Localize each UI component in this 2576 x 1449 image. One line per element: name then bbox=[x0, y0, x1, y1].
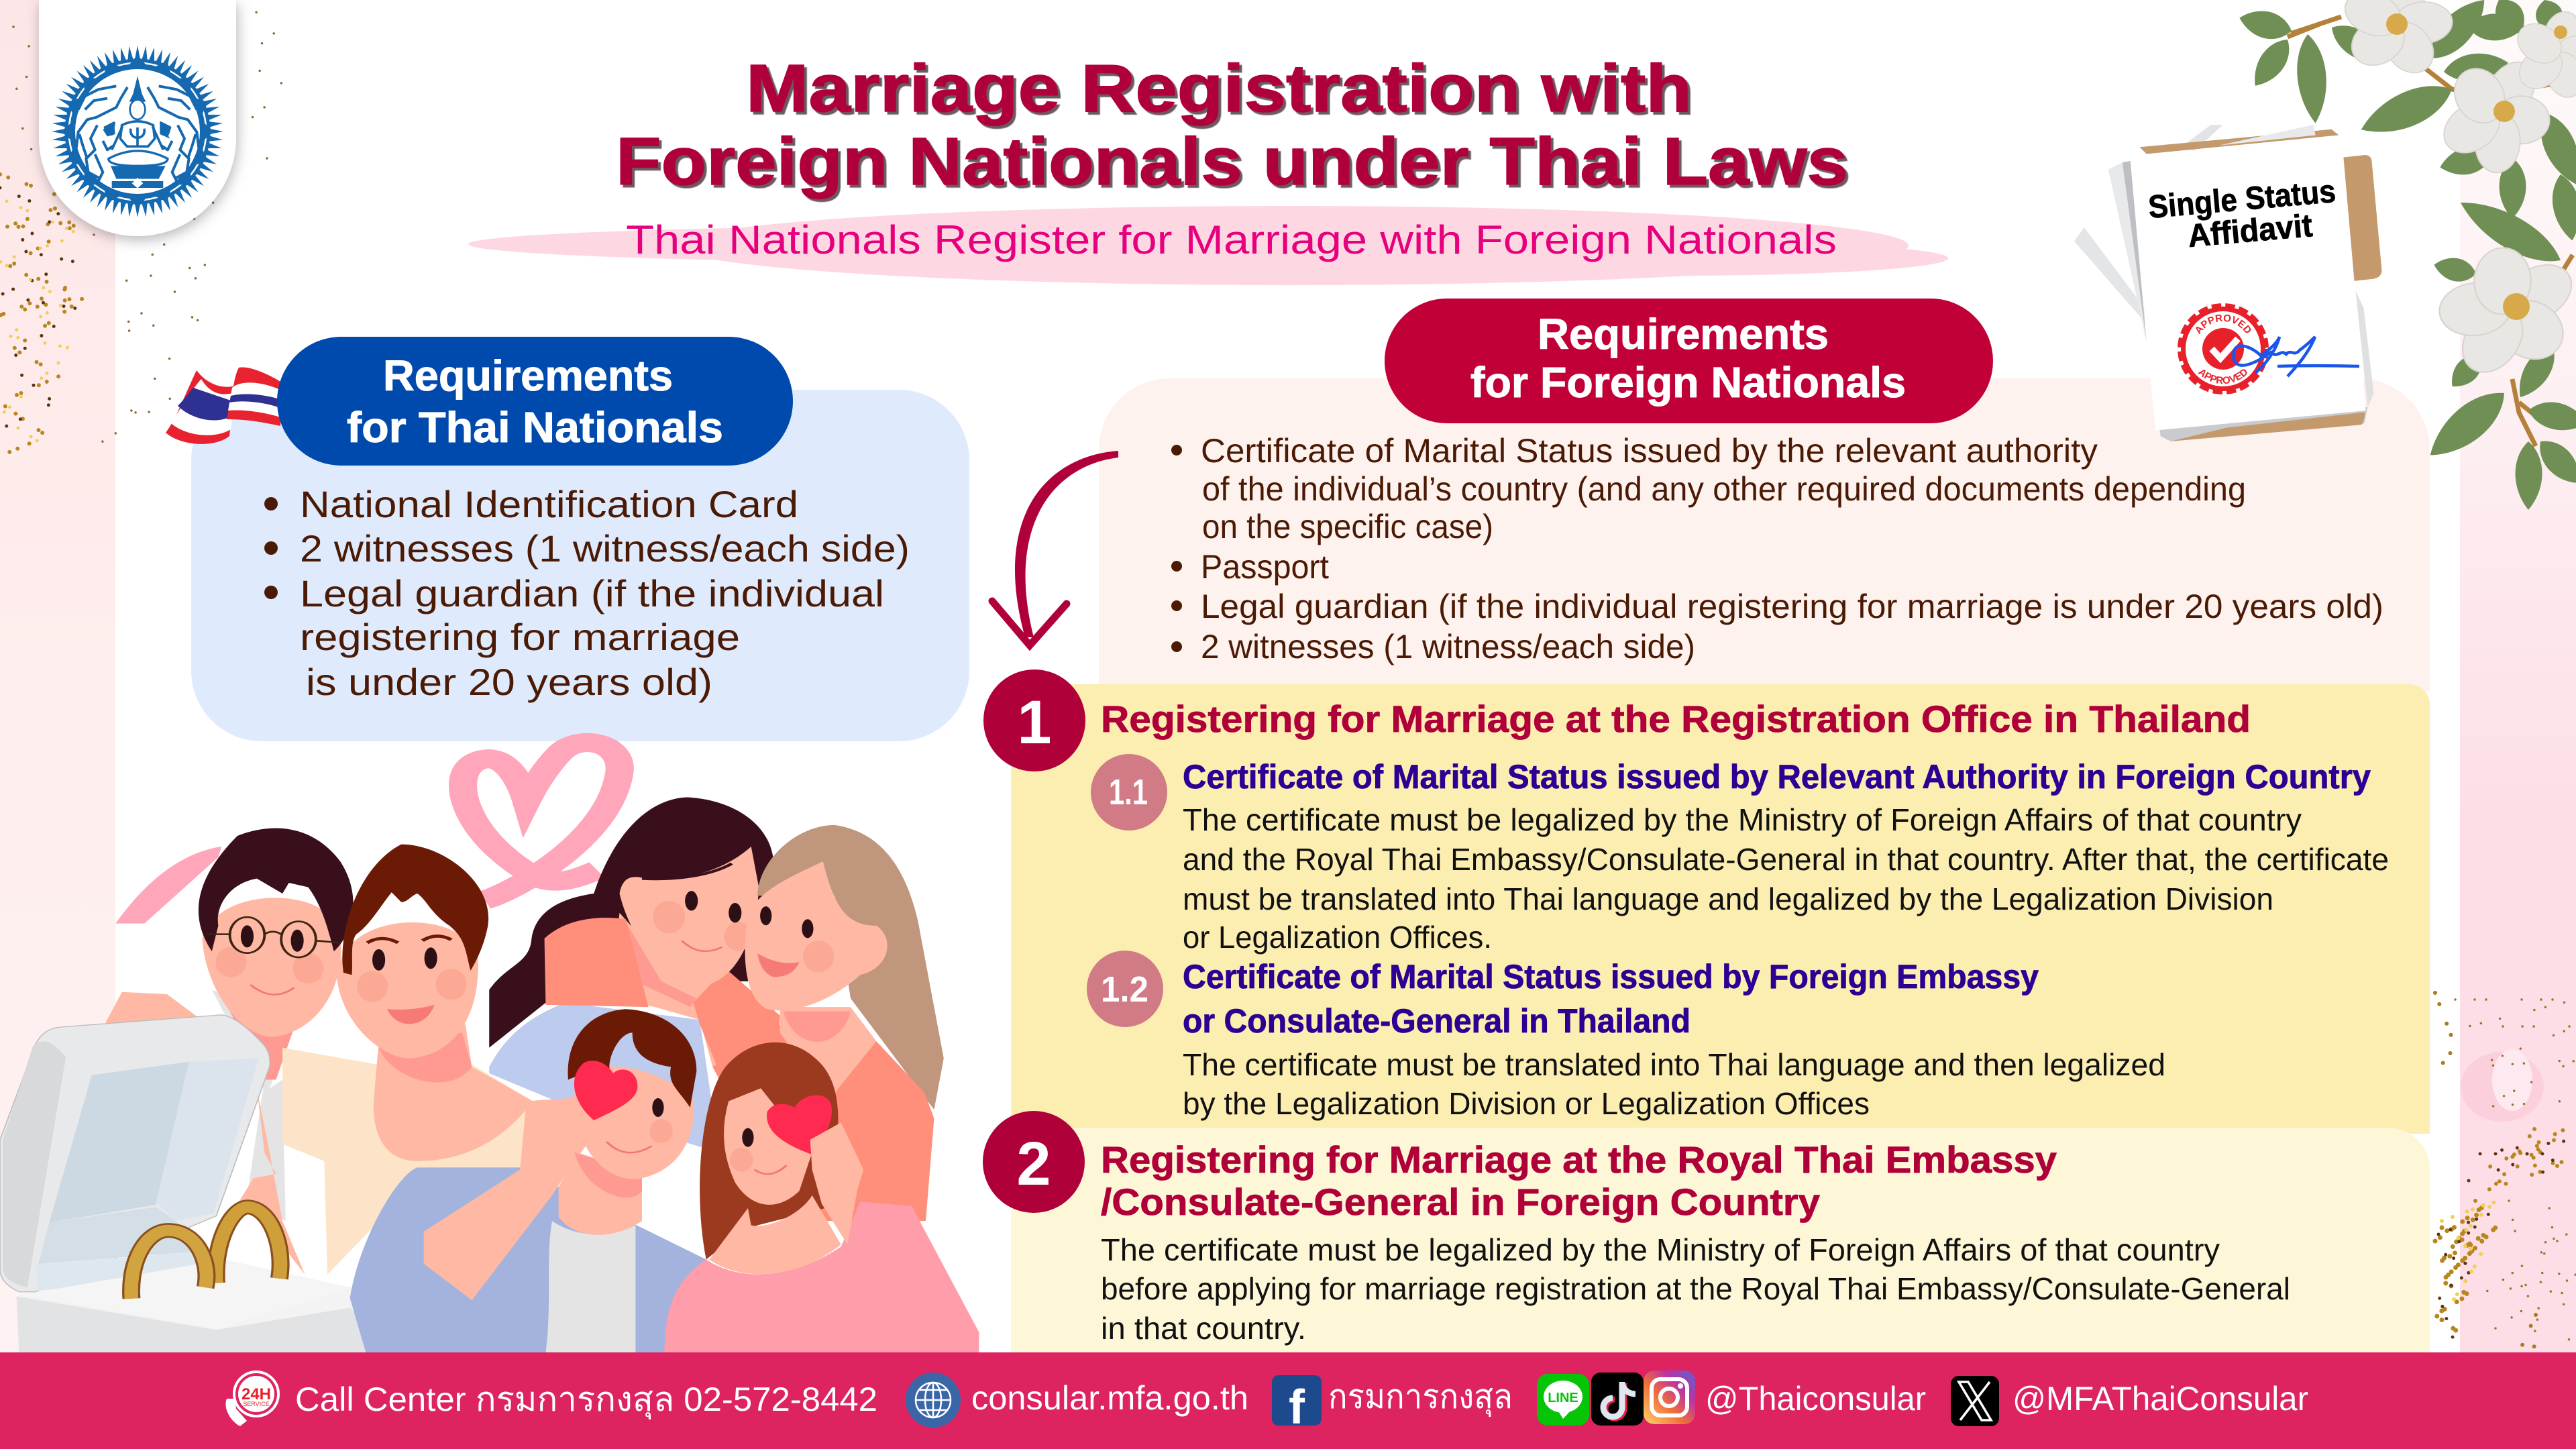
item 1.2: by the Legalization Division or Legalization Offices bbox=[1183, 1086, 1870, 1121]
illustration: couples and ring box bbox=[0, 743, 979, 1353]
document text bbox=[2147, 174, 2340, 258]
panel: section 2 registration abroad bbox=[983, 1111, 2430, 1352]
title: Foreign Nationals under Thai Laws bbox=[616, 124, 1848, 199]
icon: 24h phone: 24H bbox=[241, 1385, 271, 1403]
requirement list bbox=[264, 483, 910, 703]
arrow bbox=[992, 451, 1118, 645]
ribbon heart bbox=[115, 743, 620, 924]
heading pill: for Thai Nationals bbox=[347, 403, 723, 451]
heading pill: Requirements bbox=[383, 352, 673, 400]
icon: facebook: f bbox=[1289, 1381, 1305, 1434]
icon: facebook bbox=[1272, 1375, 1322, 1434]
icon: X bbox=[1951, 1376, 1999, 1426]
icon: approved stamp bbox=[2178, 303, 2269, 394]
requirement list: registering for marriage bbox=[300, 616, 740, 658]
item 1.1: and the Royal Thai Embassy/Consulate-General in that country. After that, the certificate bbox=[1183, 842, 2389, 877]
man in cream shirt bbox=[282, 845, 533, 1275]
number badge 1 bbox=[983, 669, 1085, 771]
illustration: single status affidavit document bbox=[2074, 125, 2381, 441]
requirement list bbox=[1171, 432, 2383, 665]
icon: globe bbox=[906, 1373, 961, 1428]
item 1.1: or Legalization Offices. bbox=[1183, 920, 1492, 955]
item 1.2: or Consulate-General in Thailand bbox=[1183, 1002, 1690, 1040]
icon: ring box bbox=[0, 1015, 383, 1352]
woman with blonde hair bbox=[712, 825, 944, 1221]
item 1.2: 1.2 bbox=[1101, 969, 1148, 1010]
requirement list: Legal guardian (if the individual registering for marriage is under 20 years old) bbox=[1201, 588, 2383, 625]
section 2 body bbox=[1101, 1232, 2290, 1346]
section 1 heading: Registering for Marriage at the Registration Office in Thailand bbox=[1101, 698, 2251, 740]
number badge 1: 1 bbox=[1017, 688, 1052, 757]
icon: approved stamp: APPROVED bbox=[2196, 315, 2251, 334]
icon: LINE bbox=[1537, 1374, 1589, 1426]
illustration: white flowers and leaves bbox=[2236, 0, 2576, 510]
heading pill: for Foreign Nationals bbox=[1470, 358, 1906, 407]
requirement list: 2 witnesses (1 witness/each side) bbox=[1201, 628, 1695, 665]
item 1.2 bbox=[1087, 951, 2165, 1121]
icon: 24h phone bbox=[225, 1372, 278, 1426]
heading pill: Requirements bbox=[1538, 310, 1829, 358]
document text: Affidavit bbox=[2186, 208, 2314, 254]
icon: red heart bbox=[767, 1095, 832, 1155]
footer contact bar bbox=[0, 1352, 2576, 1449]
Thaiconsular handle: @Thaiconsular bbox=[1705, 1380, 1926, 1417]
title bbox=[616, 51, 1848, 199]
icon: Thai flag bbox=[166, 367, 282, 444]
subtitle with pink brush: Thai Nationals Register for Marriage with Foreign Nationals bbox=[626, 217, 1837, 262]
stems bbox=[2288, 17, 2576, 446]
man with glasses bbox=[106, 828, 354, 1275]
flowers bbox=[2328, 0, 2576, 406]
logo tab with emblem bbox=[35, 0, 240, 236]
item 1.2: Certificate of Marital Status issued by Foreign Embassy bbox=[1183, 958, 2039, 996]
requirement list: of the individual’s country (and any other required documents depending bbox=[1202, 470, 2246, 508]
item 1.1: 1.1 bbox=[1109, 772, 1148, 812]
title: Marriage Registration with bbox=[746, 51, 1692, 126]
facebook name: กรมการกงสุล bbox=[1328, 1378, 1513, 1417]
icon: LINE: LINE bbox=[1548, 1391, 1578, 1405]
subtitle with pink brush bbox=[468, 206, 1948, 285]
item 1.1: must be translated into Thai language and legalized by the Legalization Division bbox=[1183, 881, 2273, 916]
section 2 body: The certificate must be legalized by the Ministry of Foreign Affairs of that country bbox=[1101, 1232, 2220, 1267]
heading pill bbox=[1385, 299, 1993, 423]
requirement list: Passport bbox=[1201, 548, 1329, 586]
item 1.1: Certificate of Marital Status issued by Relevant Authority in Foreign Country bbox=[1183, 758, 2371, 796]
signature bbox=[2233, 337, 2359, 376]
icon: Instagram bbox=[1644, 1371, 1695, 1424]
item 1.2: The certificate must be translated into Thai language and then legalized bbox=[1183, 1047, 2165, 1082]
emblem bbox=[35, 29, 240, 234]
icon: approved stamp: APPROVED bbox=[2198, 369, 2247, 384]
item 1.1 bbox=[1091, 754, 2389, 955]
website: consular.mfa.go.th bbox=[971, 1379, 1248, 1417]
icon: TikTok bbox=[1591, 1373, 1644, 1426]
MFAThaiConsular handle: @MFAThaiConsular bbox=[2012, 1380, 2308, 1417]
boy with heart bbox=[350, 1009, 706, 1353]
call center text: Call Center กรมการกงสุล 02-572-8442 bbox=[295, 1381, 877, 1419]
number badge 2 bbox=[983, 1111, 1085, 1213]
requirement list: on the specific case) bbox=[1202, 508, 1493, 545]
number badge 2: 2 bbox=[1016, 1130, 1051, 1198]
section 2 body: before applying for marriage registration at the Royal Thai Embassy/Consulate-General bbox=[1101, 1271, 2290, 1306]
icon: red heart bbox=[574, 1061, 637, 1120]
requirement list: National Identification Card bbox=[300, 483, 798, 525]
item 1.1: The certificate must be legalized by the Ministry of Foreign Affairs of that country bbox=[1183, 802, 2302, 837]
panel: requirements for foreign nationals bbox=[1099, 299, 2430, 691]
document text: Single Status bbox=[2147, 174, 2337, 225]
woman with dark hair bbox=[489, 797, 780, 1152]
requirement list: is under 20 years old) bbox=[306, 661, 712, 703]
girl with heart bbox=[664, 1042, 979, 1353]
requirement list: Certificate of Marital Status issued by the relevant authority bbox=[1201, 432, 2098, 470]
section 2 heading bbox=[1101, 1138, 2057, 1223]
panel: requirements for Thai nationals bbox=[166, 337, 969, 741]
section 2 heading: /Consulate-General in Foreign Country bbox=[1101, 1181, 1820, 1223]
requirement list: Legal guardian (if the individual bbox=[300, 572, 884, 614]
requirement list: 2 witnesses (1 witness/each side) bbox=[300, 527, 910, 570]
section 2 body: in that country. bbox=[1101, 1311, 1306, 1346]
heading pill bbox=[277, 337, 793, 466]
section 2 heading: Registering for Marriage at the Royal Thai Embassy bbox=[1101, 1138, 2057, 1181]
panel: section 1 registration in Thailand bbox=[983, 669, 2430, 1134]
icon: 24h phone: SERVICE bbox=[243, 1401, 270, 1407]
